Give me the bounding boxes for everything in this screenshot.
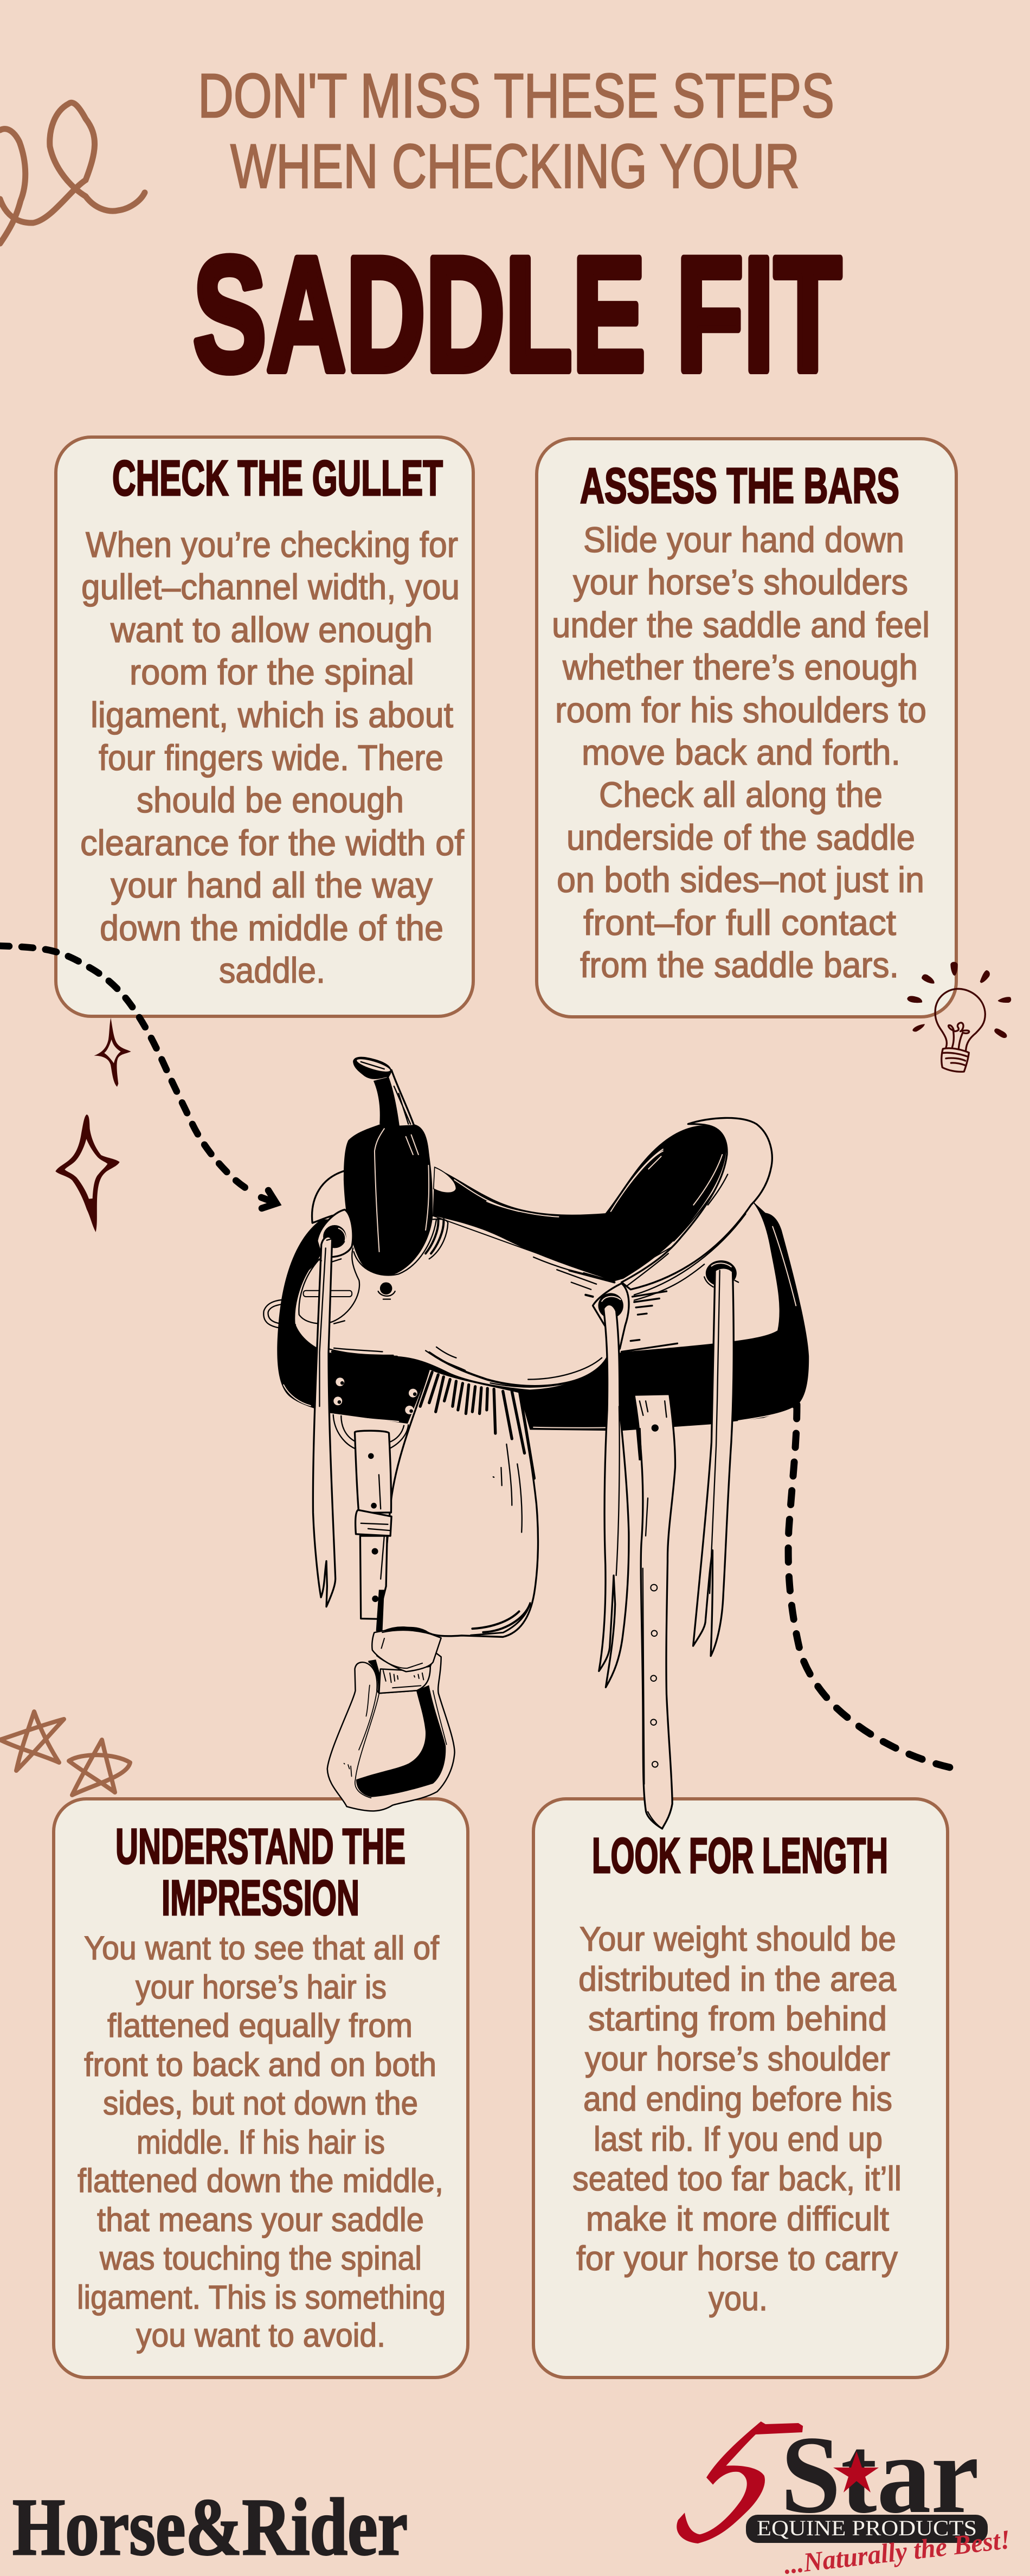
text: bars body: from the saddle bars. <box>580 945 899 985</box>
text: length body: distributed in the area <box>578 1960 897 1998</box>
text: length body: and ending before his <box>583 2080 892 2118</box>
text: length body: your horse’s shoulder <box>585 2040 890 2078</box>
heading: understand the impression: IMPRESSION <box>162 1870 359 1926</box>
text: gullet body: saddle. <box>219 950 325 990</box>
horn <box>353 1056 414 1126</box>
text: impression body: you want to avoid. <box>136 2317 385 2354</box>
logo pill <box>746 2515 988 2543</box>
text: gullet body: want to allow enough <box>110 610 433 650</box>
text: gullet body: should be enough <box>137 780 404 820</box>
arrow: dashed arrow from the bars <box>753 1291 964 1770</box>
text: bars body: room for his shoulders to <box>555 690 926 730</box>
panel: look for length <box>533 1799 948 2378</box>
title: subtitle lines: WHEN CHECKING YOUR <box>230 132 800 201</box>
text: gullet body: When you’re checking for <box>86 524 458 565</box>
icon: large sparkle <box>55 1114 120 1232</box>
text: gullet body: ligament, which is about <box>91 695 453 735</box>
text: bars body: move back and forth. <box>582 732 900 772</box>
left concho and string <box>313 1209 353 1607</box>
heading: understand the impression <box>115 1819 405 1926</box>
saddle body <box>294 1201 780 1390</box>
logo pill text: EQUINE PRODUCTS <box>757 2516 977 2540</box>
text: impression body: ligament. This is something <box>77 2279 446 2316</box>
text: bars body: underside of the saddle <box>566 817 915 857</box>
pommel <box>344 1124 433 1276</box>
text: bars body: front–for full contact <box>583 902 896 943</box>
text: impression body <box>77 1930 446 2354</box>
text: bars body: your horse’s shoulders <box>573 562 908 602</box>
icon: doodle stars <box>0 1712 130 1795</box>
text: length body: for your horse to carry <box>576 2240 898 2278</box>
front disc <box>312 1171 349 1223</box>
logo star mark <box>833 2451 879 2492</box>
title: subtitle lines: DON'T MISS THESE STEPS <box>198 61 834 131</box>
text: length body <box>572 1920 902 2318</box>
saddle skirt <box>277 1201 809 1431</box>
text: gullet body <box>80 524 465 990</box>
icon: light bulb <box>907 962 1011 1072</box>
text: length body: make it more difficult <box>586 2200 889 2238</box>
logo: 5 star equine products <box>677 2413 1012 2576</box>
text: impression body: was touching the spinal <box>99 2240 422 2277</box>
text: impression body: front to back and on both <box>84 2046 436 2083</box>
text: length body: last rib. If you end up <box>594 2120 883 2158</box>
text: gullet body: your hand all the way <box>111 865 433 905</box>
logo word star: Star <box>781 2413 979 2536</box>
text: gullet body: four fingers wide. There <box>99 738 443 778</box>
billet strap <box>355 1431 391 1631</box>
rivets <box>333 1282 417 1414</box>
seat <box>433 1125 726 1281</box>
stirrup <box>327 1603 530 1811</box>
text: bars body <box>552 520 930 985</box>
text: impression body: that means your saddle <box>97 2201 424 2238</box>
title: subtitle lines <box>198 61 834 201</box>
decorative curl top left <box>0 102 145 243</box>
text: length body: seated too far back, it’ll <box>572 2160 902 2198</box>
icon: small sparkle <box>94 1018 131 1087</box>
text: length body: you. <box>709 2280 768 2318</box>
text: length body: Your weight should be <box>580 1920 896 1958</box>
text: impression body: sides, but not down the <box>103 2085 418 2122</box>
latigo strap <box>632 1393 675 1829</box>
text: bars body: Slide your hand down <box>583 520 904 560</box>
text: impression body: You want to see that all of <box>84 1930 440 1966</box>
text: impression body: middle. If his hair is <box>137 2124 385 2161</box>
text: bars body: on both sides–not just in <box>557 860 924 900</box>
cantle <box>622 1118 772 1290</box>
illustration: western saddle <box>263 1056 809 1829</box>
text: gullet body: clearance for the width of <box>80 823 465 863</box>
panel: assess the bars <box>537 439 956 1017</box>
text: impression body: flattened down the middle, <box>78 2162 443 2199</box>
text: bars body: whether there’s enough <box>562 647 918 687</box>
text: gullet body: room for the spinal <box>130 652 414 692</box>
fender <box>379 1369 538 1637</box>
panel: understand the impression <box>54 1799 468 2378</box>
text: impression body: your horse’s hair is <box>136 1969 387 2005</box>
text: bars body: under the saddle and feel <box>552 605 930 645</box>
text: gullet body: down the middle of the <box>100 908 443 948</box>
panel: check the gullet <box>56 437 473 1016</box>
heading: check the gullet: CHECK THE GULLET <box>112 451 443 506</box>
right conchos and strings <box>593 1260 738 1687</box>
heading: understand the impression: UNDERSTAND THE <box>115 1819 405 1874</box>
text: gullet body: gullet–channel width, you <box>81 567 460 607</box>
text: impression body: flattened equally from <box>107 2007 413 2044</box>
logo numeral 5 <box>677 2421 803 2543</box>
text: bars body: Check all along the <box>599 774 883 815</box>
text: length body: starting from behind <box>588 2000 887 2038</box>
arrow: dashed arrow to the gullet <box>0 946 276 1208</box>
fender lower edge <box>384 1604 530 1632</box>
logo: horse and rider: Horse&Rider <box>12 2482 408 2572</box>
cinch ring <box>333 1414 408 1449</box>
